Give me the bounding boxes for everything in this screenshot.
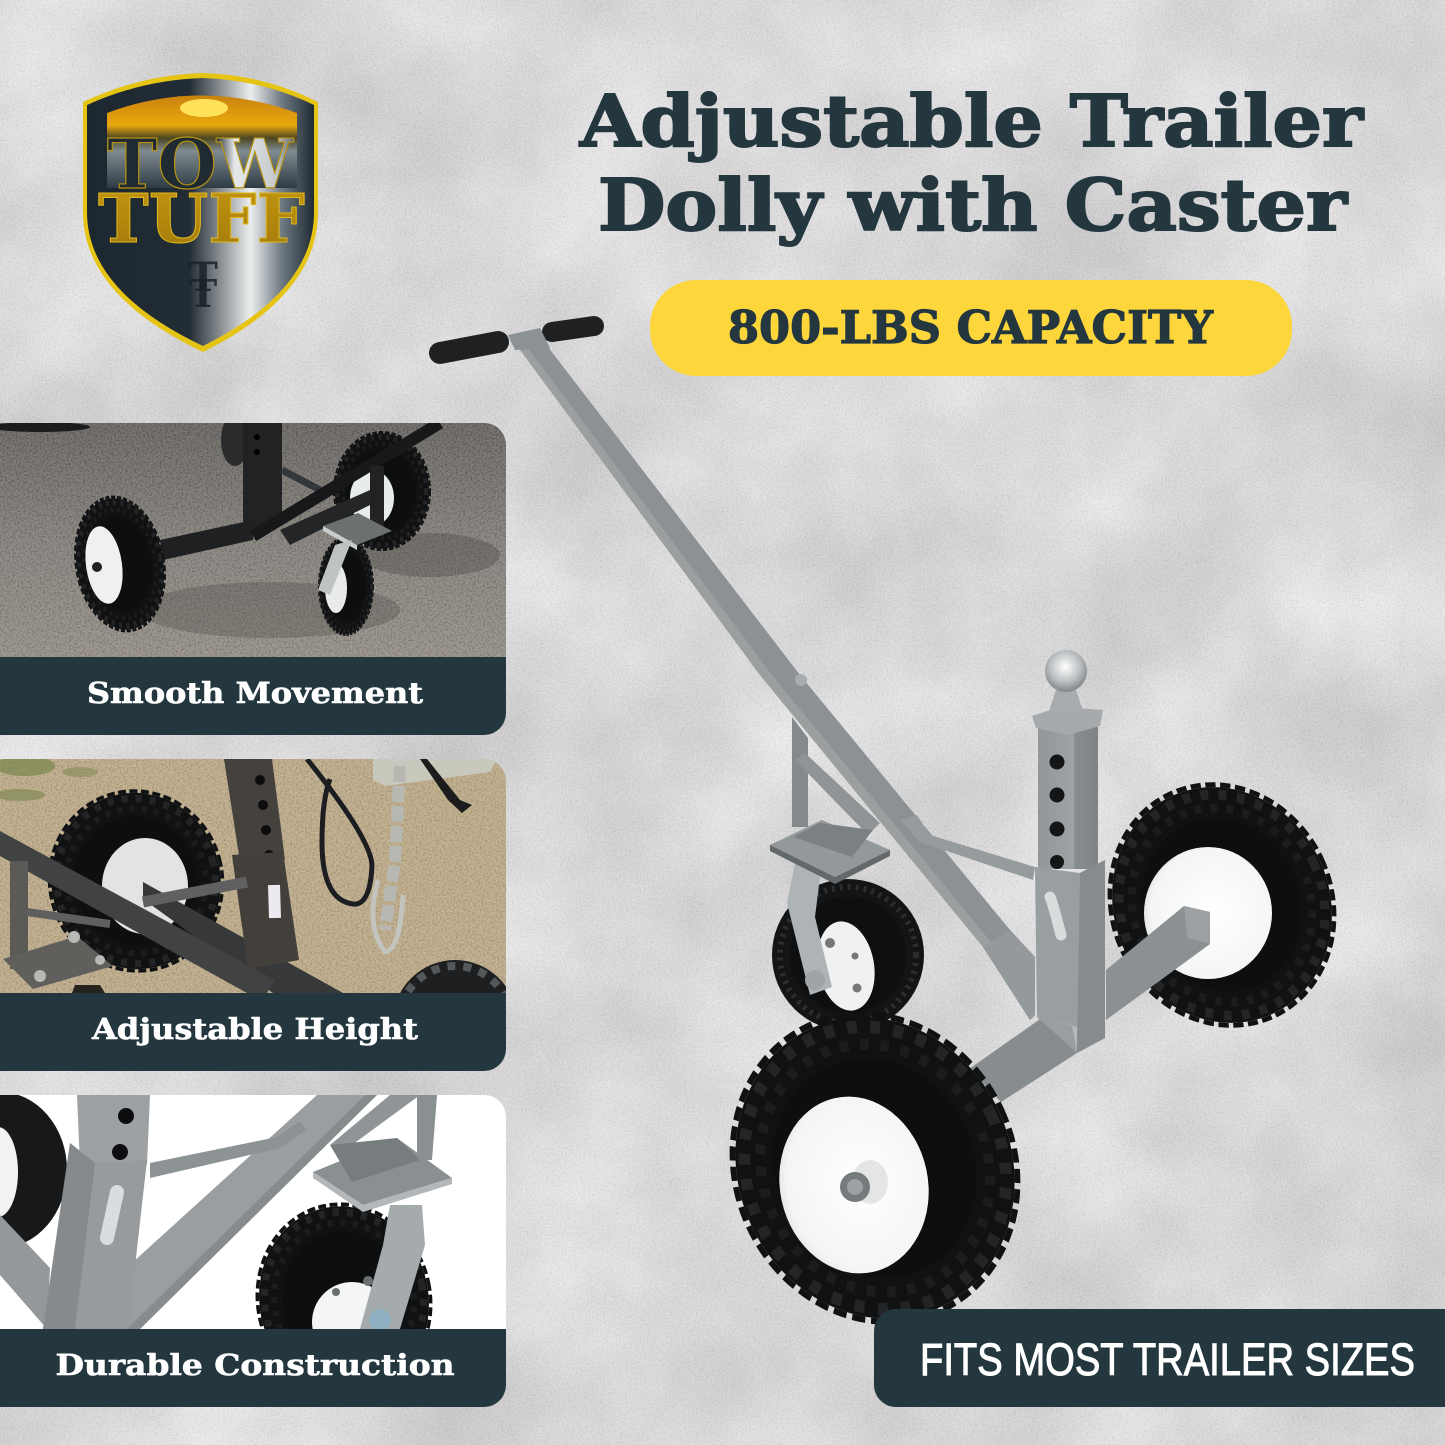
- caption band: [0, 1329, 506, 1407]
- T-handle grips: [440, 326, 594, 353]
- fits most trailer sizes banner: [874, 1309, 1445, 1407]
- height-adjustable post: [1032, 707, 1105, 1053]
- title: Dolly with Caster: [598, 163, 1349, 247]
- photo: dolly on asphalt: [0, 414, 506, 657]
- panel: durable construction: [0, 1092, 506, 1412]
- front wheel: [683, 967, 1067, 1369]
- caster wheel: [772, 879, 924, 1031]
- logo wordmark: TOW: [107, 125, 295, 205]
- caption band: [0, 993, 506, 1071]
- logo wordmark: T: [189, 271, 217, 316]
- logo wordmark: TUFF: [98, 179, 305, 258]
- panel: smooth movement: [0, 414, 506, 735]
- caption: Smooth Movement: [87, 676, 424, 710]
- hitch ball: [1045, 650, 1087, 714]
- caster plate and fork: [770, 815, 1035, 995]
- title: Adjustable Trailer: [579, 79, 1365, 163]
- caption: Adjustable Height: [91, 1012, 419, 1046]
- logo wordmark: T: [188, 254, 218, 301]
- panel: adjustable height: [0, 756, 517, 1084]
- rear wheel: [1071, 748, 1373, 1062]
- photo: height pin on dirt: [0, 759, 506, 993]
- logo: Tow Tuff shield: [83, 73, 318, 352]
- logo wordmark: [98, 125, 305, 316]
- capacity badge: 800-LBS CAPACITY: [728, 301, 1214, 354]
- trailer dolly product illustration: [440, 326, 1373, 1369]
- photo: close-up of frame: [0, 1095, 506, 1329]
- caster upright and brace: [792, 717, 880, 835]
- handle shaft: [515, 343, 1035, 1020]
- caption: Durable Construction: [56, 1348, 454, 1382]
- capacity badge: [650, 280, 1292, 376]
- caption band: [0, 657, 506, 735]
- title: [579, 79, 1365, 247]
- axle: [969, 906, 1210, 1102]
